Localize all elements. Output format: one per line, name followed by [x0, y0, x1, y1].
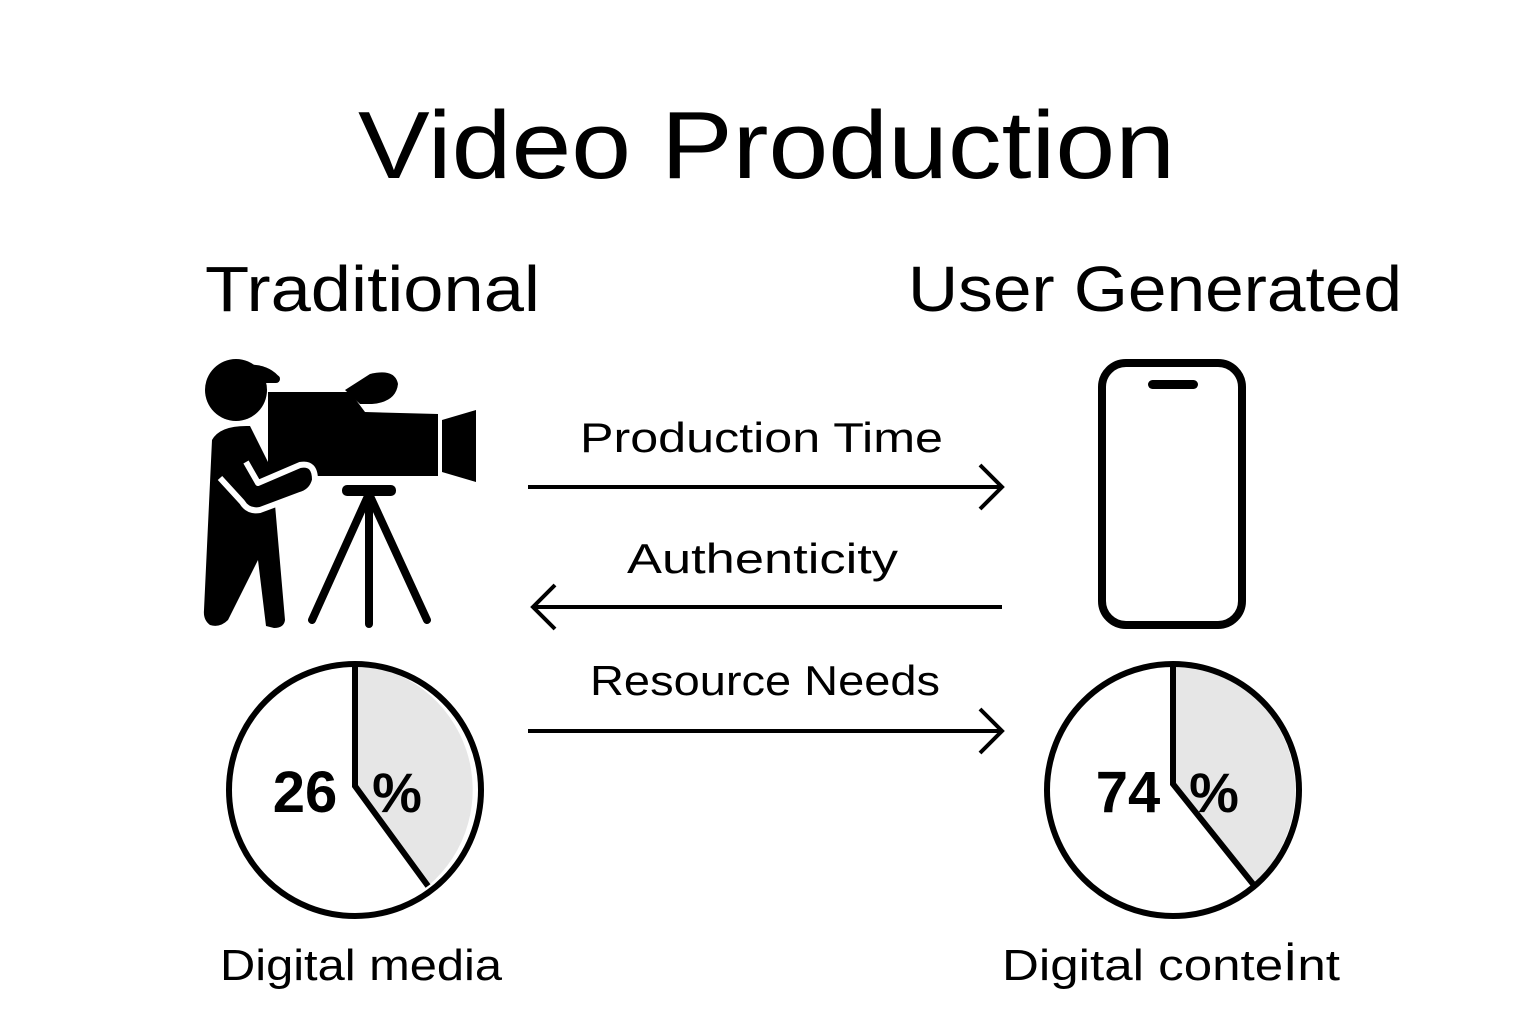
caption: digital content: Digital conteİnt	[1002, 941, 1340, 990]
icon: smartphone	[1102, 363, 1242, 625]
title: Video Production	[358, 92, 1175, 199]
label: resource needs: Resource Needs	[590, 657, 940, 704]
pie chart: user generated 74%	[1047, 664, 1299, 916]
icon: camera operator	[204, 359, 476, 628]
heading: user generated: User Generated	[908, 253, 1402, 325]
label: production time: Production Time	[580, 414, 943, 461]
label: authenticity: Authenticity	[627, 535, 898, 582]
pie chart: user generated 74%: 74	[1096, 760, 1160, 825]
pie chart: traditional 26%: %	[372, 761, 422, 824]
caption: digital media: Digital media	[220, 941, 503, 990]
pie chart: user generated 74%: %	[1189, 761, 1239, 824]
pie chart: traditional 26%: 26	[273, 760, 337, 825]
arrow: right 2	[528, 709, 1002, 753]
heading: traditional: Traditional	[205, 253, 540, 325]
arrow: right 1	[528, 465, 1002, 509]
arrow: left	[533, 585, 1002, 629]
pie chart: traditional 26%	[229, 664, 481, 916]
